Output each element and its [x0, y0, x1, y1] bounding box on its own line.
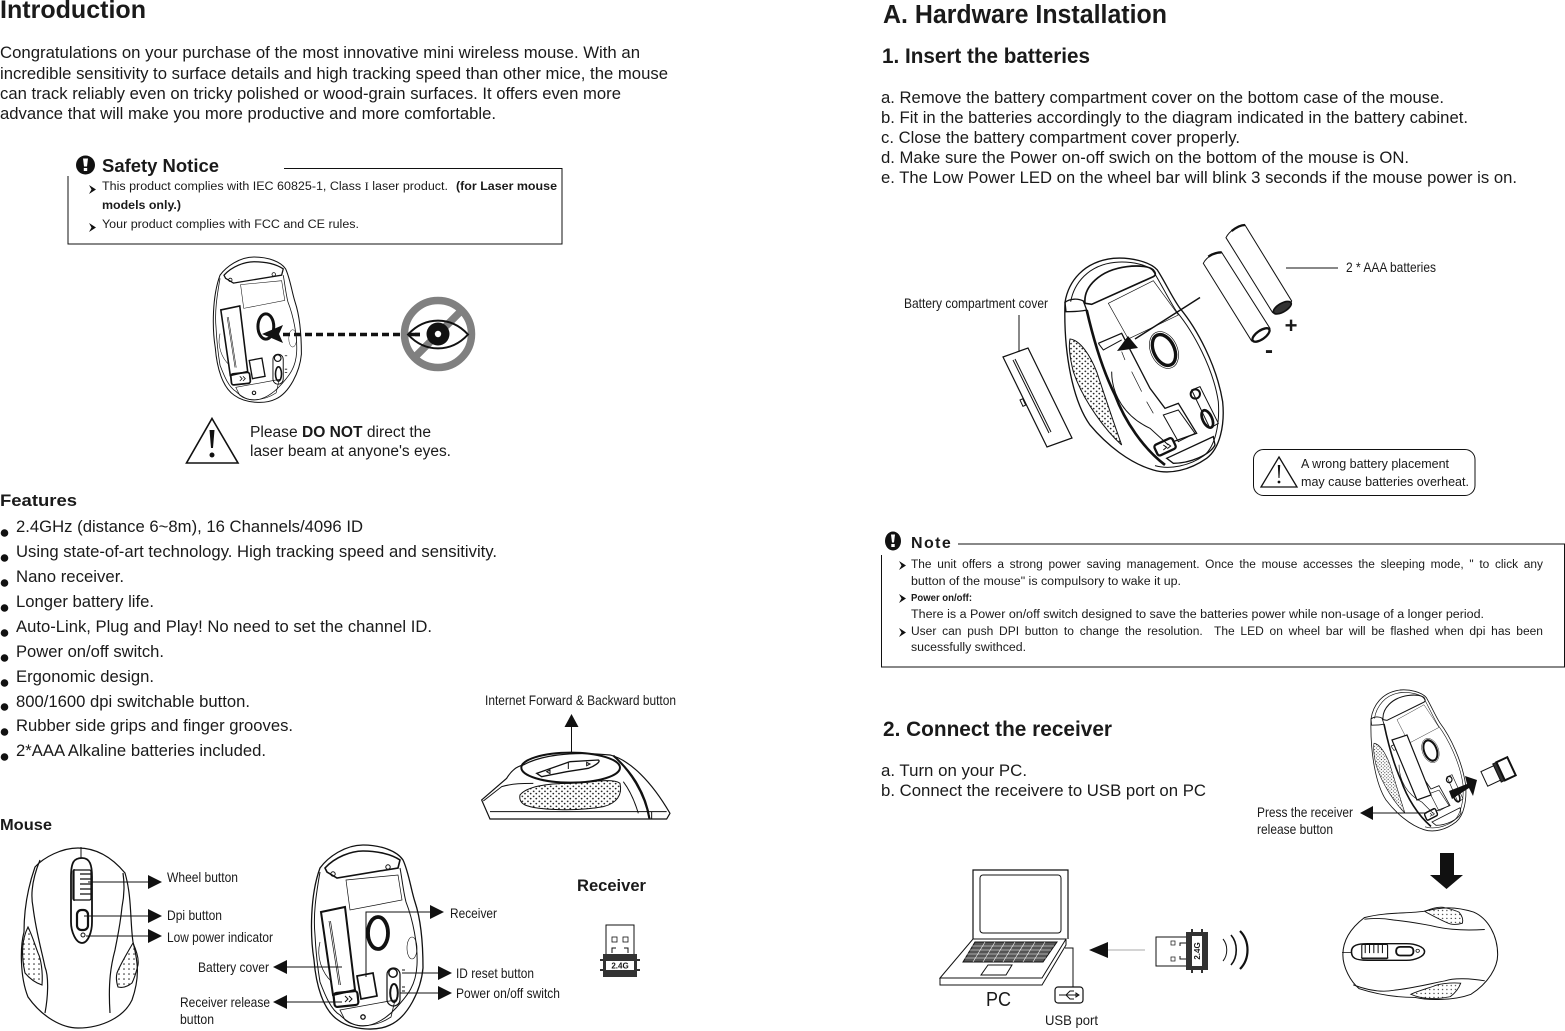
callout: receiver	[366, 905, 497, 977]
heading: Hardware Installation: A. Hardware Installation	[883, 1, 1167, 29]
arrow: laser beam dashed	[262, 325, 420, 343]
heading: Insert the batteries: 1. Insert the batteries	[882, 45, 1090, 68]
callout: internet forward and backward button: Internet Forward & Backward button	[485, 692, 676, 708]
bullet: power saving	[899, 559, 1543, 588]
diagram: mouse side view	[482, 753, 670, 819]
icon: warning triangle	[186, 418, 238, 463]
callout: wrong battery placement warning	[1254, 450, 1475, 496]
icon: USB receiver	[600, 925, 640, 977]
callout: battery cover	[198, 959, 342, 975]
callout: press receiver release button: release button	[1257, 821, 1333, 837]
bullet: laser compliance: This product complies with IEC 60825-1, Class I laser product.	[102, 181, 448, 193]
text: laser warning	[250, 424, 451, 460]
callout: low power indicator	[86, 929, 273, 945]
icon: receiver removed from mouse	[1480, 757, 1516, 788]
text block: battery steps: c. Close the battery compartment cover properly.	[881, 129, 1240, 147]
label: PC: PC	[986, 989, 1011, 1011]
icon: safety exclamation	[76, 156, 95, 174]
arrow: down step	[1430, 853, 1463, 889]
diagram: mouse top view	[21, 847, 138, 1028]
bullet: power saving: The unit offers a strong power saving management. Once the mouse accesses the sleeping mode, " to click any	[911, 559, 1543, 571]
bullet: power saving: button of the mouse" is compulsory to wake it up.	[911, 576, 1181, 588]
text block: introduction paragraph: can track reliably even on tricky polished or wood-grain surfaces. It offers even more	[0, 84, 621, 103]
diagram: mouse releasing receiver	[1371, 690, 1466, 831]
text block: connect steps: b. Connect the receivere to USB port on PC	[881, 782, 1206, 800]
list: features	[1, 518, 497, 761]
diagram: laptop	[940, 870, 1068, 985]
text block: battery steps: a. Remove the battery compartment cover on the bottom case of the mouse.	[881, 89, 1444, 107]
icon: battery compartment cover	[1003, 348, 1072, 447]
icon: prohibited eye	[404, 300, 472, 368]
text block: battery steps: b. Fit in the batteries accordingly to the diagram indicated in the battery cabinet.	[881, 109, 1468, 127]
safety notice heading: Safety Notice	[102, 155, 219, 176]
callout: wheel button	[88, 869, 238, 889]
callout: AAA batteries: 2 * AAA batteries	[1346, 259, 1436, 275]
callout: receiver release button: button	[180, 1011, 214, 1027]
bullet: power on/off: Power on/off:	[911, 592, 972, 604]
callout: wheel button: Wheel button	[167, 869, 238, 885]
heading: Receiver: Receiver	[577, 877, 647, 895]
panel: note	[882, 532, 1564, 667]
text block: connect steps: a. Turn on your PC.	[881, 762, 1027, 780]
text block: introduction paragraph: Congratulations on your purchase of the most innovative mini wireless mouse. With an	[0, 43, 640, 62]
text block: introduction paragraph: advance that will make you more productive and more comfortable.	[0, 104, 496, 123]
callout: internet forward and backward button	[485, 692, 676, 753]
note heading: Note	[911, 535, 952, 552]
label: USB port: USB port	[1045, 1012, 1098, 1028]
callout: press receiver release button: Press the receiver	[1257, 804, 1353, 820]
callout: press receiver release button	[1257, 804, 1427, 837]
list: features: Power on/off switch.	[16, 643, 164, 661]
list: features: 2*AAA Alkaline batteries included.	[16, 742, 266, 760]
icon: wireless waves	[1223, 931, 1248, 969]
bullet: FCC and CE: Your product complies with FCC and CE rules.	[102, 219, 359, 231]
callout: battery cover: Battery cover	[198, 959, 269, 975]
callout: ID reset button	[402, 965, 534, 981]
arrow: insert batteries	[1117, 298, 1200, 351]
arrow: receiver out	[1449, 776, 1477, 799]
polarity minus: -	[1265, 337, 1273, 364]
list: features: Auto-Link, Plug and Play! No need to set the channel ID.	[16, 618, 432, 636]
bullet: DPI button: sucessfully swithced.	[911, 642, 1026, 654]
callout: dpi button: Dpi button	[167, 907, 222, 923]
text block: connect steps	[881, 762, 1206, 800]
text: laser warning: laser beam at anyone's eyes.	[250, 443, 451, 460]
icon: note exclamation	[885, 532, 901, 550]
bullet: laser compliance	[89, 181, 557, 212]
panel: safety notice	[68, 155, 562, 244]
list: features: Rubber side grips and finger grooves.	[16, 717, 293, 735]
polarity plus: +	[1285, 313, 1297, 338]
callout: power switch	[400, 985, 560, 1001]
text block: introduction paragraph	[0, 43, 668, 123]
icon: USB receiver: 2.4G	[611, 962, 629, 970]
callout: receiver release button: Receiver release	[180, 994, 270, 1010]
list: features: Using state-of-art technology. High tracking speed and sensitivity.	[16, 543, 497, 561]
list: features: 800/1600 dpi switchable button.	[16, 693, 250, 711]
callout: battery compartment cover: Battery compartment cover	[904, 295, 1048, 311]
list: features: Longer battery life.	[16, 593, 154, 611]
callout: low power indicator: Low power indicator	[167, 929, 273, 945]
callout: receiver: Receiver	[450, 905, 497, 921]
text block: battery steps	[881, 89, 1517, 187]
text block: battery steps: d. Make sure the Power on-off swich on the bottom of the mouse is ON.	[881, 149, 1409, 167]
diagram: mouse with battery compartment open	[1065, 258, 1223, 472]
bullet: DPI button	[899, 626, 1543, 654]
callout: dpi button	[84, 907, 222, 923]
callout: power switch: Power on/off switch	[456, 985, 560, 1001]
diagram: mouse top view horizontal	[1342, 907, 1498, 999]
callout: receiver release button	[180, 994, 342, 1027]
bullet: power on/off	[899, 592, 1484, 621]
heading: Mouse: Mouse	[0, 817, 52, 834]
list: features: 2.4GHz (distance 6~8m), 16 Channels/4096 ID	[16, 518, 363, 536]
bullet: DPI button: User can push DPI button to change the resolution. The LED on wheel bar will be flashed when dpi has been	[911, 626, 1543, 638]
diagram: mouse bottom view	[312, 845, 423, 1029]
bullet: laser compliance: (for Laser mouse	[456, 181, 557, 193]
list: features: Ergonomic design.	[16, 668, 154, 686]
arrow: receiver to laptop	[1089, 942, 1145, 958]
icon: USB receiver horizontal: 2.4G	[1193, 942, 1202, 960]
diagram: mouse underside with laser	[213, 257, 301, 402]
icon: AAA batteries	[1203, 225, 1293, 344]
callout: ID reset button: ID reset button	[456, 965, 534, 981]
icon: USB receiver horizontal	[1156, 929, 1208, 973]
icon: USB port	[1055, 948, 1083, 1003]
heading: Connect the receiver: 2. Connect the receiver	[883, 718, 1112, 741]
text block: introduction paragraph: incredible sensitivity to surface details and high tracking speed than other mice, the mouse	[0, 64, 668, 83]
callout: wrong battery placement warning: A wrong battery placement	[1301, 457, 1450, 471]
bullet: power on/off: There is a Power on/off switch designed to save the batteries power while non-usage of a longer period.	[911, 609, 1484, 621]
bullet: laser compliance: models only.)	[102, 200, 181, 212]
heading: Features: Features	[0, 491, 77, 510]
list: features: Nano receiver.	[16, 568, 124, 586]
callout: wrong battery placement warning: may cause batteries overheat.	[1301, 475, 1469, 489]
text block: battery steps: e. The Low Power LED on the wheel bar will blink 3 seconds if the mouse power is on.	[881, 169, 1517, 187]
text: laser warning: Please DO NOT direct the	[250, 424, 431, 441]
